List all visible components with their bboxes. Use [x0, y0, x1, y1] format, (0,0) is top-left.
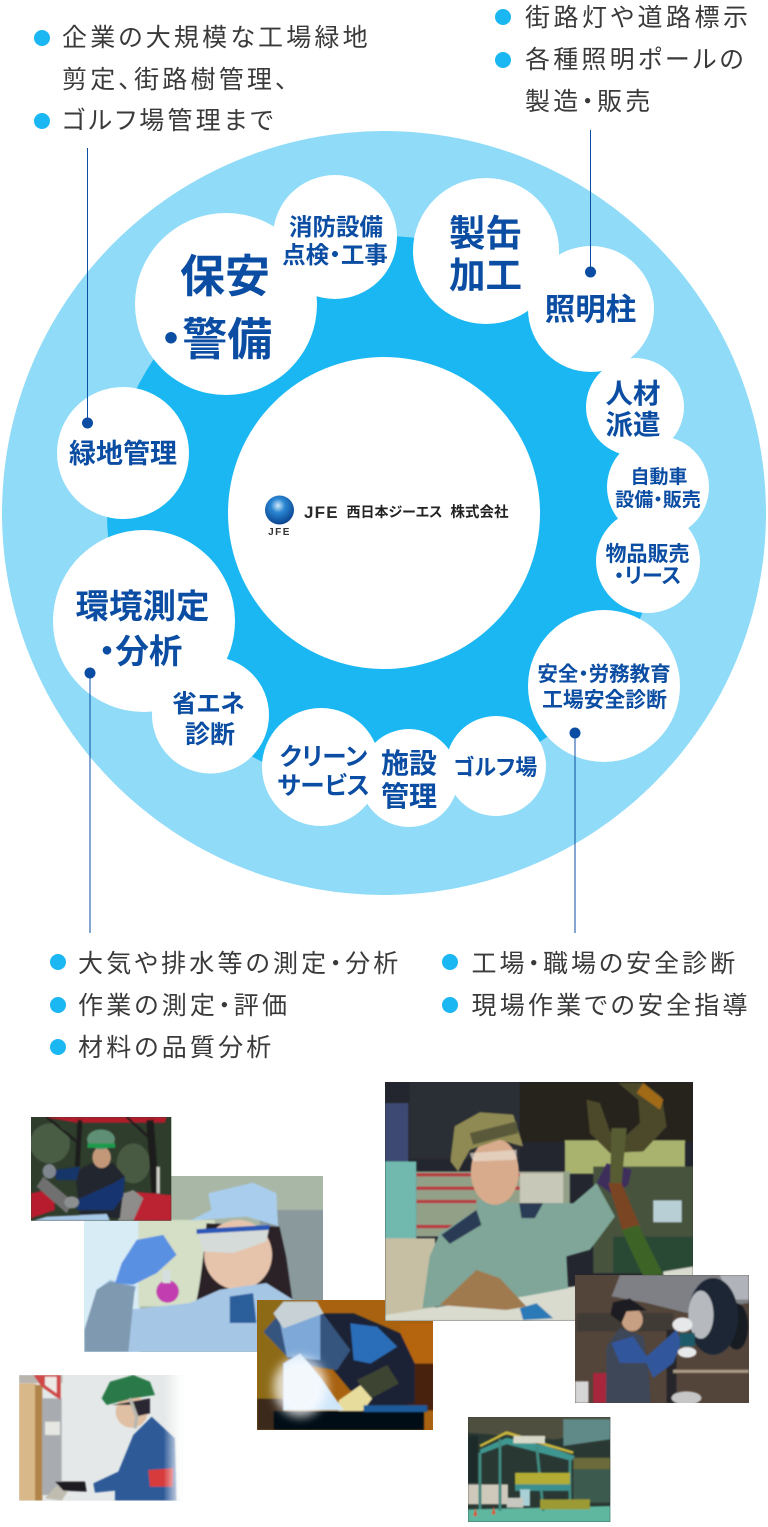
- logo: JFE West Japan GS: [265, 496, 509, 538]
- label: facility management: 施設: [381, 748, 437, 779]
- photo: welder: [257, 1300, 433, 1430]
- circle: security: 保安: [180, 251, 270, 302]
- circle: clean service: [262, 708, 380, 826]
- circle: environment measurement: 環境測定: [76, 589, 210, 626]
- text block: green space details: 企業の大規模な工場緑地: [62, 24, 371, 52]
- center white circle: [228, 357, 540, 669]
- circle: automotive: [607, 436, 709, 538]
- text block: measurement details: 大気や排水等の測定・分析: [78, 950, 401, 978]
- circle: green space: 緑地管理: [69, 439, 177, 469]
- circle: fire equipment: [273, 175, 397, 299]
- callout line: safety: [570, 728, 580, 933]
- circle: automotive: 設備・販売: [615, 489, 701, 511]
- text block: lighting details: 各種照明ポールの: [525, 46, 747, 74]
- circle: safety education: 安全・労務教育: [537, 663, 671, 686]
- circle: environment measurement: ・分析: [99, 634, 182, 671]
- text block: lighting details: 製造・販売: [525, 88, 654, 116]
- photo: crane hook operator: [385, 1082, 693, 1321]
- circle: security: ・警備: [160, 314, 272, 365]
- photo: tractor driver: [31, 1117, 172, 1221]
- circle: can manufacturing: 加工: [449, 255, 522, 296]
- logo: JFE West Japan GS: JFE: [268, 527, 291, 538]
- logo: JFE West Japan GS: 株式会社: [450, 504, 509, 521]
- circle: can manufacturing: [413, 178, 559, 324]
- circle: energy saving: [152, 656, 269, 774]
- text block: safety details: 工場・職場の安全診断: [472, 950, 738, 978]
- circle: facility management: [360, 729, 458, 827]
- circle: goods sales: 物品販売: [606, 543, 690, 566]
- text block: safety details: [442, 950, 751, 1020]
- circle: clean service: サービス: [277, 772, 370, 800]
- circle: energy saving: 省エネ: [172, 690, 245, 718]
- circle: goods sales: [596, 509, 700, 613]
- circle: security: [135, 213, 317, 395]
- label: facility management: 管理: [381, 781, 437, 812]
- logo: JFE West Japan GS: JFE: [304, 503, 339, 522]
- outer light blue ring: [2, 131, 766, 895]
- photo: lab analyst with flask: [84, 1176, 323, 1352]
- circle: environment measurement: [53, 530, 235, 712]
- circle: lighting poles: [528, 246, 654, 372]
- circle: energy saving: 診断: [185, 721, 235, 749]
- circle: safety education: [528, 610, 680, 762]
- circle: staffing: 人材: [606, 378, 660, 409]
- circle: safety education: 工場安全診断: [542, 689, 667, 712]
- circle: lighting poles: 照明柱: [545, 293, 636, 327]
- inner blue ring: [107, 236, 661, 790]
- text block: green space details: [34, 24, 371, 135]
- circle: automotive: 自動車: [630, 466, 688, 488]
- text block: green space details: ゴルフ場管理まで: [62, 107, 276, 135]
- diagram: business circles: [2, 131, 766, 895]
- photo: car mechanic: [575, 1275, 749, 1403]
- callout line: lighting poles: [585, 130, 596, 278]
- circle: goods sales: ・リース: [614, 565, 681, 588]
- text block: lighting details: [495, 4, 751, 116]
- text block: safety details: 現場作業での安全指導: [472, 992, 751, 1020]
- logo: JFE West Japan GS: 西日本ジーエス: [346, 504, 442, 520]
- circle: staffing: 派遣: [606, 409, 660, 440]
- text block: measurement details: [50, 950, 401, 1062]
- label: facility management: [381, 748, 437, 812]
- circle: fire equipment: 点検・工事: [282, 242, 388, 268]
- circle: staffing: [586, 358, 684, 456]
- circle: can manufacturing: 製缶: [449, 213, 522, 254]
- photo: industrial plant: [468, 1417, 610, 1522]
- text block: measurement details: 材料の品質分析: [78, 1034, 275, 1062]
- circle: green space: [57, 387, 189, 519]
- photo: worker at control panel: [19, 1375, 182, 1501]
- circle: golf course: [446, 716, 546, 816]
- text block: green space details: 剪定、街路樹管理、: [62, 66, 291, 94]
- circle: clean service: クリーン: [280, 743, 368, 771]
- text block: lighting details: 街路灯や道路標示: [525, 4, 751, 32]
- callout line: green space: [82, 148, 93, 428]
- circle: golf course: ゴルフ場: [453, 755, 537, 780]
- callout line: environment: [84, 668, 96, 933]
- circle: fire equipment: 消防設備: [289, 214, 383, 240]
- text block: measurement details: 作業の測定・評価: [78, 992, 290, 1020]
